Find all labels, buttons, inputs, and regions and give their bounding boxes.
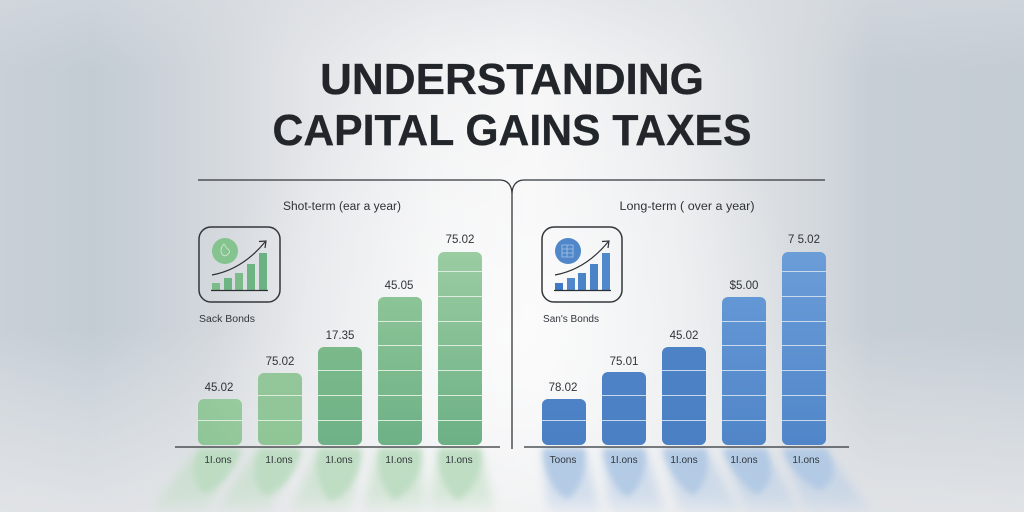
panel: long-term <box>524 201 870 511</box>
bar: 3 <box>662 347 706 445</box>
value labels: 17.35 <box>326 330 354 342</box>
bar: 2 <box>258 373 302 445</box>
icon caption: short-term: Sack Bonds <box>199 314 255 325</box>
heading: short-term: Shot-term (ear a year) <box>283 201 401 213</box>
bar chart: long-term <box>524 234 870 511</box>
icon caption: long-term: San's Bonds <box>543 314 599 325</box>
title: UNDERSTANDING <box>320 55 704 104</box>
bar: 5 <box>438 252 482 445</box>
bar: 5 <box>782 252 826 445</box>
bar chart: short-term <box>150 234 500 511</box>
baseline <box>175 446 500 448</box>
category labels: 1I.ons <box>670 455 698 466</box>
category labels: 1I.ons <box>610 455 638 466</box>
category labels: 1I.ons <box>730 455 758 466</box>
value labels: 75.02 <box>266 356 294 368</box>
category labels: 1I.ons <box>204 455 232 466</box>
bar: 4 <box>722 297 766 445</box>
category labels: Toons <box>550 455 576 466</box>
bar shadows <box>150 449 495 511</box>
value labels: 45.02 <box>205 382 233 394</box>
category labels: 1I.ons <box>385 455 413 466</box>
title <box>272 55 752 155</box>
divider: bracket between panels <box>198 180 825 449</box>
baseline <box>524 446 849 448</box>
bar: 1 <box>198 399 242 445</box>
category labels <box>550 455 820 466</box>
category labels: 1I.ons <box>265 455 293 466</box>
value labels: 75.01 <box>610 356 638 368</box>
value labels: $5.00 <box>730 280 758 292</box>
category labels: 1I.ons <box>325 455 353 466</box>
bar shadows <box>542 449 870 511</box>
value labels: 7 5.02 <box>788 234 820 246</box>
icon: long-term growth chart <box>542 227 622 302</box>
panel: short-term <box>150 201 500 511</box>
value labels <box>205 234 474 394</box>
category labels <box>204 455 473 466</box>
category labels: 1I.ons <box>445 455 473 466</box>
bar: 3 <box>318 347 362 445</box>
icon: short-term growth chart <box>199 227 280 302</box>
bar: 4 <box>378 297 422 445</box>
heading: long-term: Long-term ( over a year) <box>620 201 755 213</box>
value labels: 45.02 <box>670 330 698 342</box>
value labels <box>549 234 820 394</box>
bar: 2 <box>602 372 646 445</box>
value labels: 75.02 <box>446 234 474 246</box>
value labels: 45.05 <box>385 280 413 292</box>
title: CAPITAL GAINS TAXES <box>272 106 752 155</box>
bar: 1 <box>542 399 586 445</box>
category labels: 1I.ons <box>792 455 820 466</box>
value labels: 78.02 <box>549 382 577 394</box>
